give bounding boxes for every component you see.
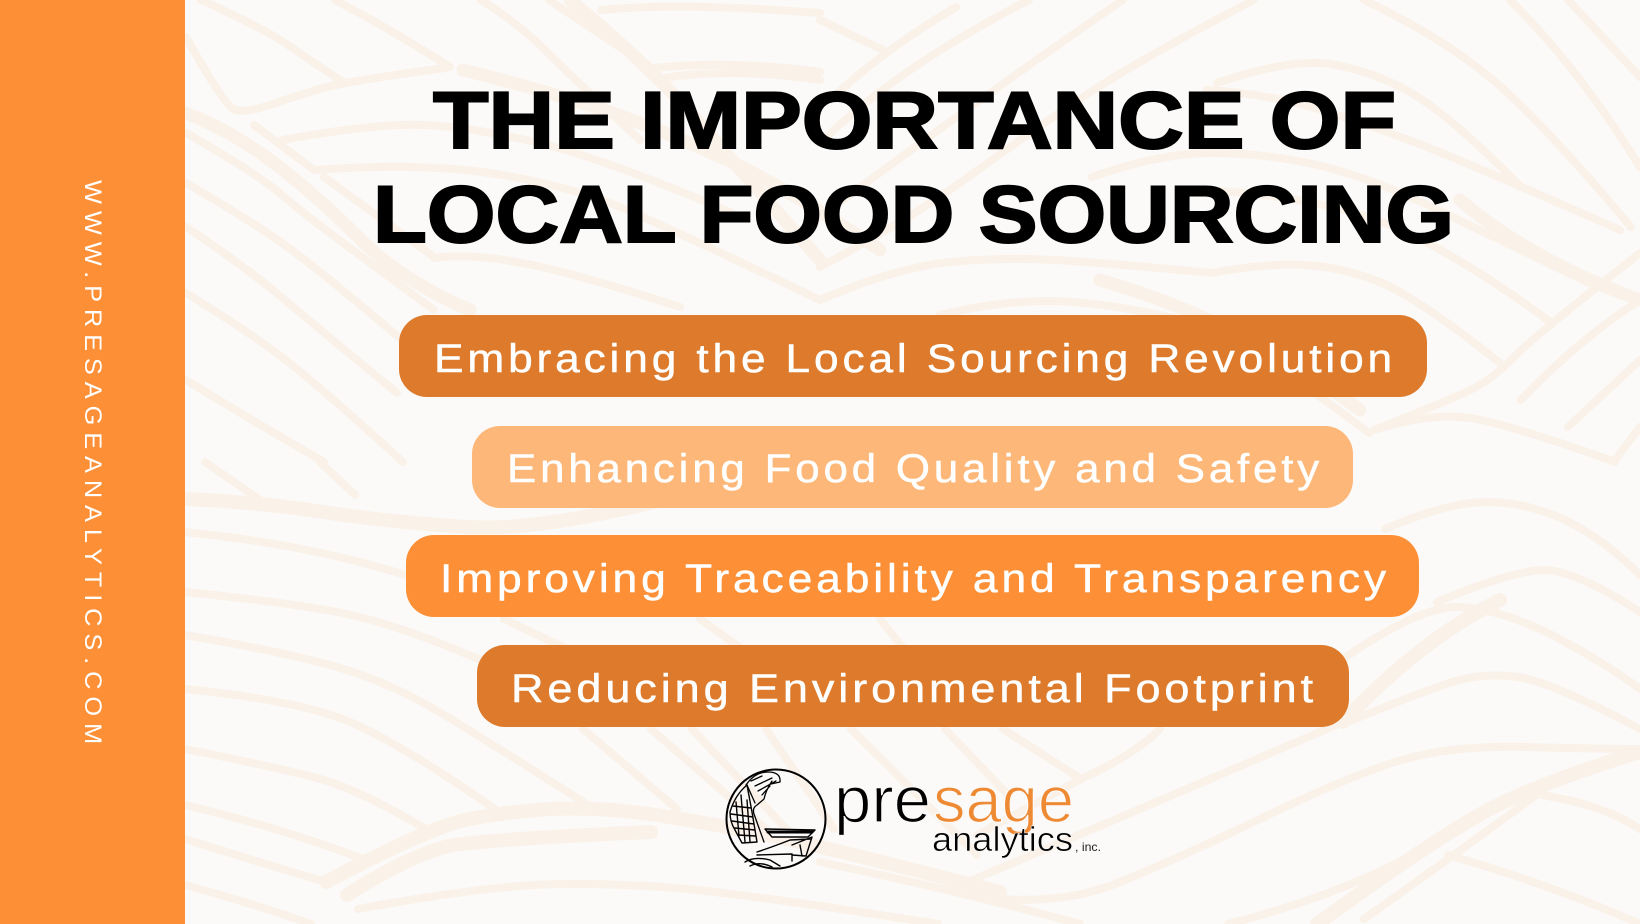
pill: Reducing Environmental Footprint: Reducing Environmental Footprint <box>511 667 1317 711</box>
pill: Improving Traceability and Transparency <box>406 535 1419 617</box>
pill: Enhancing Food Quality and Safety: Enhancing Food Quality and Safety <box>507 447 1323 491</box>
title: THE IMPORTANCE OF <box>433 76 1396 166</box>
pill: Improving Traceability and Transparency: Improving Traceability and Transparency <box>440 557 1390 601</box>
pill: Reducing Environmental Footprint <box>477 645 1349 727</box>
icon: circular emblem of figure holding a bowl <box>726 770 826 868</box>
sidebar website url vertical text: WWW.PRESAGEANALYTICS.COM <box>79 180 106 751</box>
logo wordmark <box>834 763 1101 859</box>
pill: Embracing the Local Sourcing Revolution <box>399 315 1427 397</box>
title: LOCAL FOOD SOURCING <box>373 170 1454 260</box>
logo wordmark: pre <box>834 763 931 836</box>
logo wordmark: , inc. <box>1075 840 1101 854</box>
title <box>373 76 1454 260</box>
pill: Enhancing Food Quality and Safety <box>472 426 1353 508</box>
logo: Presage Analytics <box>726 763 1101 868</box>
logo wordmark: analytics <box>932 821 1073 859</box>
pill: Embracing the Local Sourcing Revolution: Embracing the Local Sourcing Revolution <box>434 337 1396 381</box>
sidebar panel <box>0 0 185 924</box>
logo wordmark: sage <box>933 763 1074 836</box>
